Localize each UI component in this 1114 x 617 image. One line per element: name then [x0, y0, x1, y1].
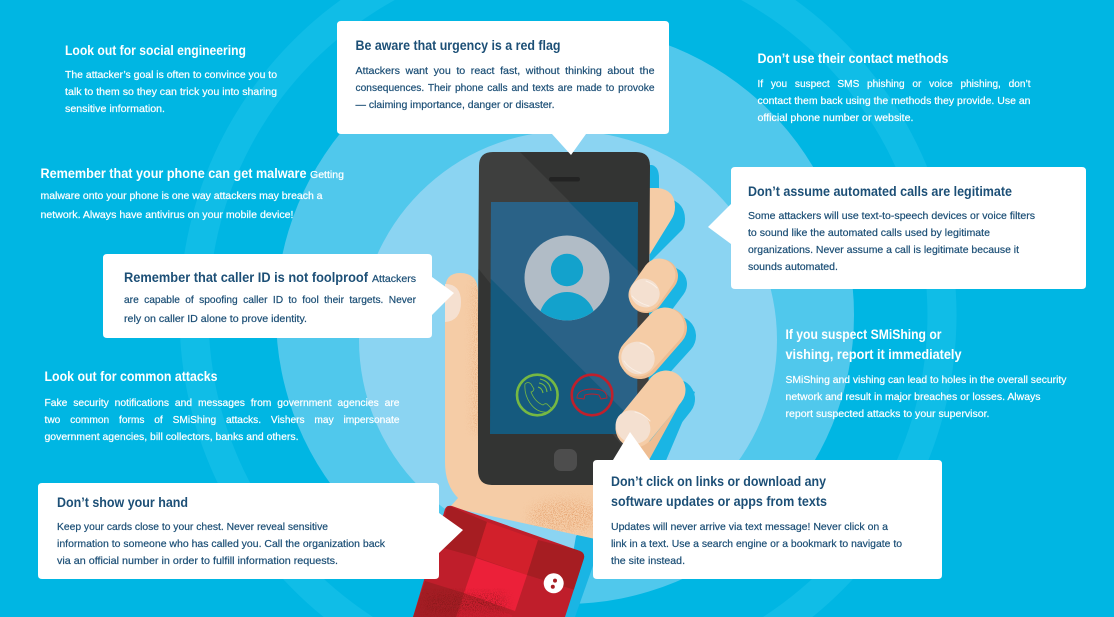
text block: report it: If you suspect SMiShing or [786, 327, 942, 342]
card: don't show your hand [38, 483, 463, 579]
card: links and downloads: Don’t click on links or download any [611, 474, 826, 489]
card: links and downloads: link in a text. Use a search engine or a bookmark to navigate to [611, 539, 902, 550]
text block: report it: SMiShing and vishing can lead to holes in the overall security [786, 375, 1067, 386]
finger 4 [609, 390, 685, 462]
card: don't show your hand: via an official number in order to fulfill information requests. [57, 556, 338, 567]
text block: report it: network and result in major breaches or losses. Always [786, 392, 1040, 403]
card: automated calls: sounds automated. [748, 262, 838, 273]
finger 3 [615, 327, 667, 381]
text block: contact methods [758, 51, 1031, 124]
text block: malware: malware onto your phone is one way attackers may breach a [40, 191, 323, 202]
text block: report it: report suspected attacks to your supervisor. [786, 409, 990, 420]
palm and thumb [445, 273, 600, 540]
text block: common attacks: government agencies, bill collectors, banks and others. [44, 432, 298, 443]
card: don't show your hand: Keep your cards close to your chest. Never reveal sensitive [57, 522, 328, 533]
card: automated calls: Don’t assume automated calls are legitimate [748, 184, 1012, 199]
contact avatar [524, 236, 610, 320]
shirt cuff [410, 500, 590, 617]
speaker [549, 177, 580, 182]
card: urgency is a red flag: consequences. Their phone calls and texts are made to provoke [356, 83, 655, 94]
card: caller ID: rely on caller ID alone to prove identity. [124, 314, 307, 325]
text block: social engineering: Look out for social engineering [65, 43, 246, 58]
text block: common attacks: two common forms of SMiShing attacks. Vishers may impersonate [44, 415, 400, 426]
text block: report it: vishing, report it immediately [786, 347, 962, 362]
card: links and downloads: Updates will never arrive via text message! Never click on a [611, 522, 888, 533]
card: caller ID: Remember that caller ID is not foolproof [124, 270, 368, 285]
illustration: hand holding phone [410, 152, 695, 617]
decline call button [572, 375, 612, 415]
concentric background circles [179, 0, 957, 617]
card: urgency is a red flag: Be aware that urgency is a red flag [356, 38, 560, 53]
card: links and downloads [593, 432, 942, 579]
text block: contact methods: If you suspect SMS phishing or voice phishing, don’t [758, 79, 1031, 90]
card: caller ID [103, 254, 454, 338]
text block: social engineering: talk to them so they can trick you into sharing [65, 87, 277, 98]
text block: social engineering [65, 43, 277, 115]
card: caller ID: are capable of spoofing caller ID to fool their targets. Never [124, 295, 417, 306]
home button [554, 449, 577, 471]
phone glare on bezel [478, 152, 649, 445]
text block: malware: Getting [310, 170, 344, 181]
back finger [645, 188, 675, 254]
card: urgency is a red flag: — claiming importance, danger or disaster. [356, 100, 554, 111]
thumb nail [445, 284, 461, 322]
card: links and downloads: the site instead. [611, 556, 685, 567]
text block: malware [40, 166, 344, 221]
text block: malware: network. Always have antivirus on your mobile device! [40, 210, 294, 221]
finger 2 [625, 273, 665, 313]
text block: contact methods: Don’t use their contact methods [758, 51, 948, 66]
text block: common attacks: Fake security notifications and messages from government agencies are [44, 398, 400, 409]
drop shadows of phone and fingers [562, 165, 695, 617]
card: links and downloads: software updates or apps from texts [611, 494, 827, 509]
text block: common attacks: Look out for common attacks [44, 369, 218, 384]
answer call button [517, 375, 558, 415]
phone body [477, 152, 650, 485]
text block: report it [786, 327, 1067, 420]
text block: malware: Remember that your phone can get malware [40, 166, 307, 181]
palm grain shading [474, 282, 601, 532]
card: caller ID: Attackers [372, 274, 416, 285]
text block: contact methods: official phone number or website. [758, 113, 914, 124]
card: automated calls [708, 167, 1086, 289]
card: automated calls: Some attackers will use text-to-speech devices or voice filters [748, 211, 1035, 222]
card: automated calls: to sound like the automated calls used by legitimate [748, 228, 990, 239]
cuff button [544, 573, 564, 593]
text block: common attacks [44, 369, 400, 443]
card: urgency is a red flag [337, 21, 669, 155]
text block: social engineering: The attacker’s goal is often to convince you to [65, 70, 277, 81]
card: don't show your hand: Don’t show your hand [57, 495, 188, 510]
card: don't show your hand: information to someone who has called you. Call the organization back [57, 539, 386, 550]
text block: contact methods: contact them back using the methods they provide. Use an [758, 96, 1030, 107]
card: automated calls: organizations. Never assume a call is legitimate because it [748, 245, 1019, 256]
card: urgency is a red flag: Attackers want you to react fast, without thinking about the [356, 66, 655, 77]
phone screen [490, 202, 638, 434]
text block: social engineering: sensitive information. [65, 104, 165, 115]
